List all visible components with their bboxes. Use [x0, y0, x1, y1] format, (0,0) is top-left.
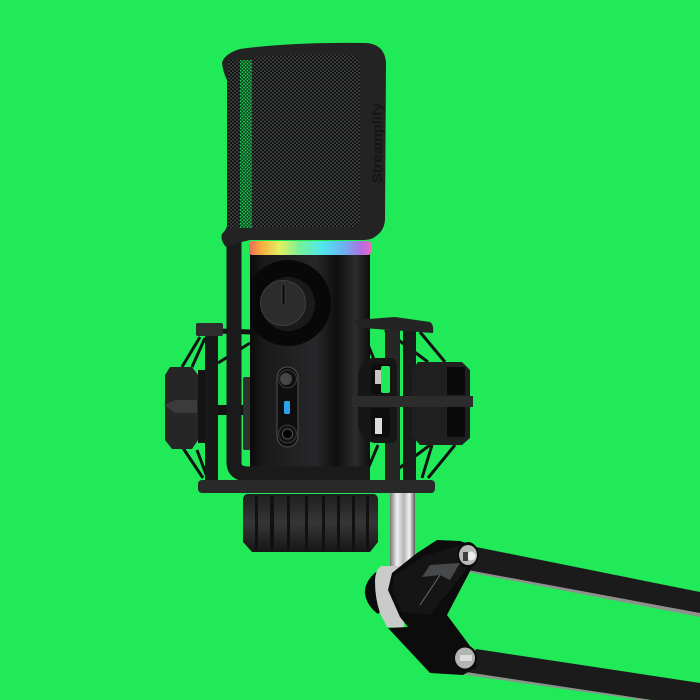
left inner mount tab [243, 377, 251, 450]
left mesh [228, 60, 240, 228]
right posts [385, 330, 416, 480]
base plate [198, 480, 435, 493]
u bracket [234, 240, 370, 474]
pin top [375, 370, 381, 384]
lower bolt [453, 645, 477, 671]
main mesh [252, 55, 360, 227]
wheel grooves [255, 496, 369, 550]
bracket face [392, 545, 470, 615]
rear black cap [365, 572, 392, 614]
top plate [355, 317, 433, 333]
brand text: Streamplify [369, 103, 385, 183]
shock mount rear struts [182, 330, 455, 478]
dial collar [250, 260, 331, 346]
base ring [250, 468, 370, 478]
rubber block [412, 362, 470, 445]
control strip [277, 367, 298, 447]
hole bottom [371, 408, 390, 437]
pin bottom [375, 418, 382, 434]
top cap [196, 323, 223, 336]
status LED [284, 401, 290, 414]
USB port [278, 370, 296, 388]
clip [358, 358, 397, 443]
post [205, 335, 218, 481]
chrome clamp [375, 566, 404, 628]
chrome pole [390, 490, 415, 572]
rgb light ring [249, 241, 371, 255]
right shock mount [352, 317, 473, 445]
upper arm bar [468, 547, 700, 617]
rear post [198, 370, 205, 443]
adjustment wheel [243, 494, 378, 552]
headphone jack [278, 425, 296, 443]
left shock mount [164, 323, 223, 481]
boom arm [466, 547, 700, 700]
dial knob [260, 277, 315, 331]
arm bracket [365, 540, 478, 675]
frame [222, 43, 386, 247]
upper bolt [458, 542, 478, 568]
bracket highlight [422, 563, 460, 580]
tab [164, 400, 197, 413]
left struts [182, 331, 252, 478]
pop filter [222, 43, 386, 247]
block window [447, 367, 465, 395]
rubber block [165, 367, 198, 449]
cross bar [352, 396, 473, 407]
right struts [362, 330, 455, 478]
lower arm bar [466, 649, 700, 700]
bracket edge [420, 575, 440, 605]
microphone body [250, 254, 370, 478]
green strip mesh [240, 60, 252, 228]
hole top [371, 364, 390, 394]
bracket body [388, 540, 477, 675]
